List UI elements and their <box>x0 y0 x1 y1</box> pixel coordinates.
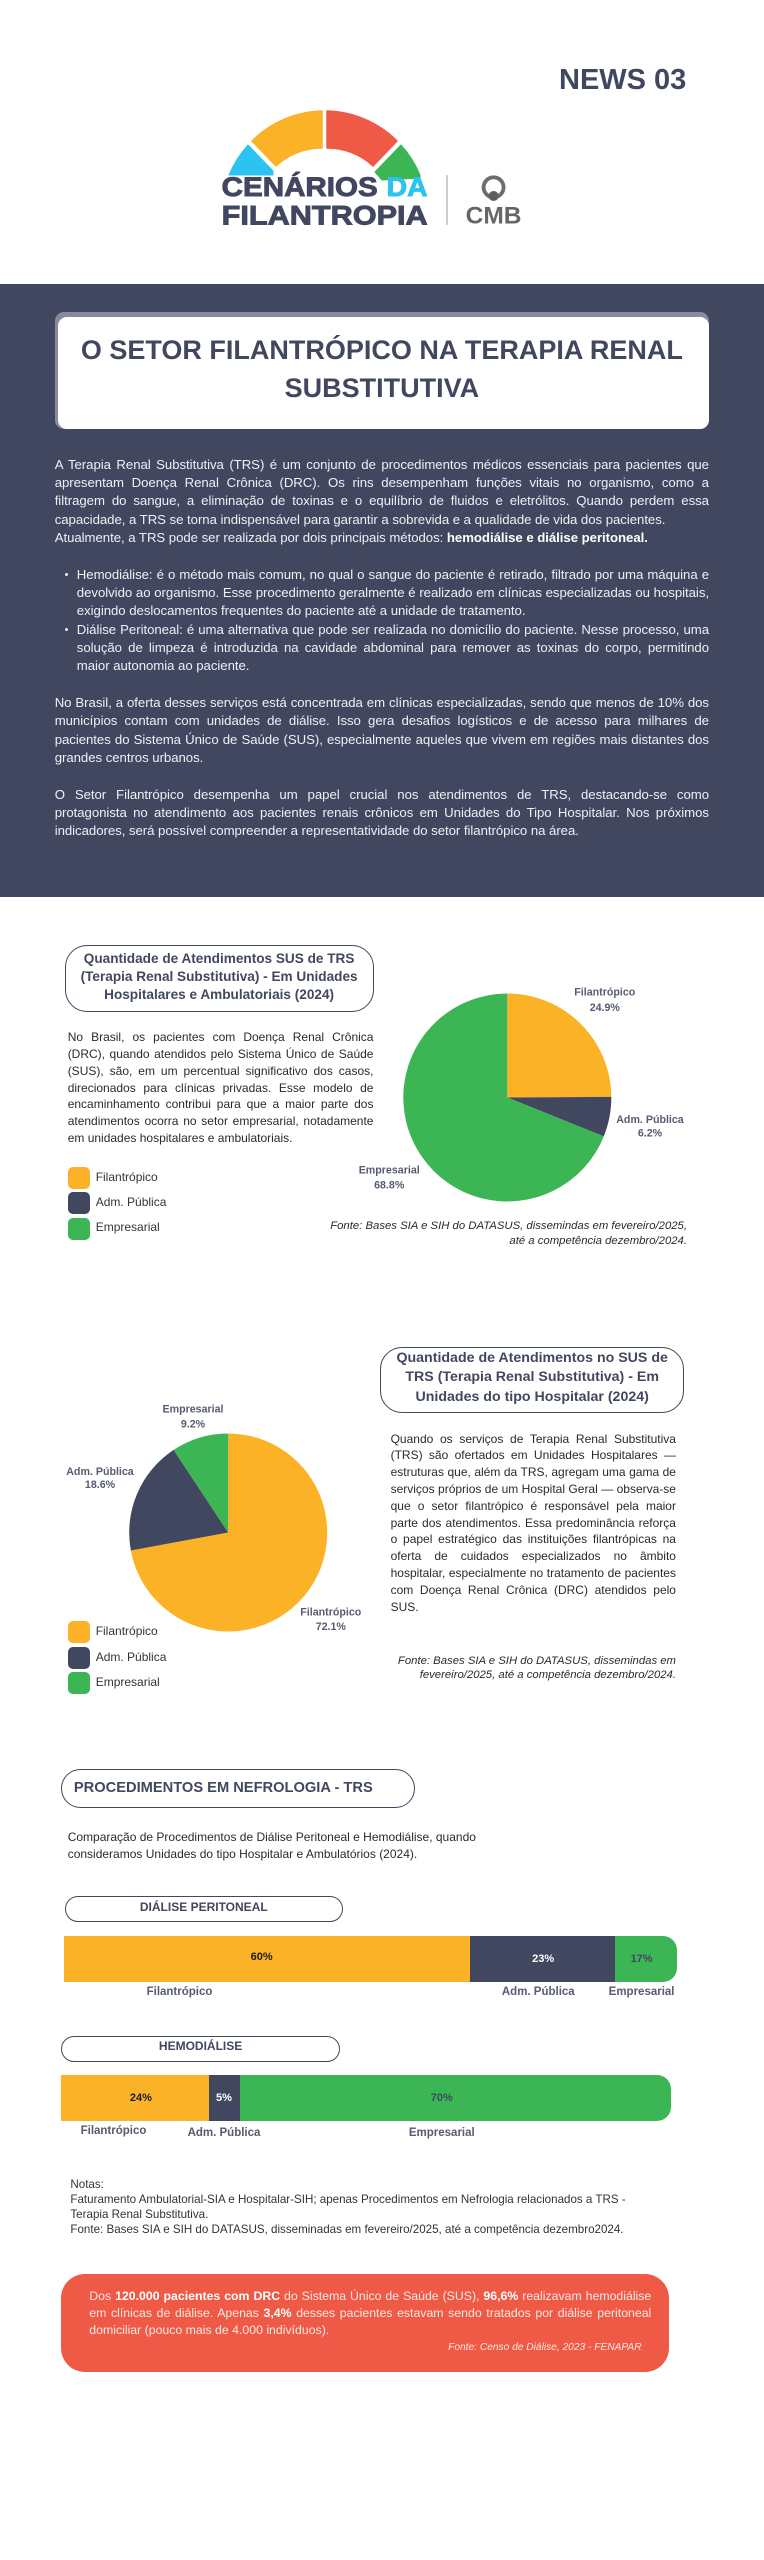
pie chart: atendimentos em unidades hospitalares: 18.6% <box>85 1479 116 1491</box>
text block: TRS definition: capacidade, a TRS se torna indispensável para garantir a sobrevida e a qualidade de vida dos pacientes. <box>55 512 665 527</box>
text block: DRC patients in SUS: encaminhamento contribui para que a maior parte dos <box>68 1097 373 1111</box>
stacked bar: diálise peritoneal: 23% <box>532 1953 554 1965</box>
text block: TRS definition: A Terapia Renal Substitutiva (TRS) é um conjunto de procedimentos médicos essenciais para pacientes que <box>55 457 709 472</box>
pie chart: atendimentos em unidades hospitalares: Filantrópico <box>300 1606 362 1618</box>
stacked bar: hemodiálise: 70% <box>431 2092 453 2104</box>
pie chart: atendimentos SUS de TRS: 24.9% <box>590 1002 620 1014</box>
pie chart: atendimentos SUS de TRS: Filantrópico <box>574 986 636 998</box>
legend: first pie: Filantrópico <box>96 1170 158 1184</box>
heading pill: atendimentos em unidades hospitalares: Unidades do tipo Hospitalar (2024) <box>416 1389 649 1405</box>
pie chart: atendimentos SUS de TRS: 6.2% <box>638 1127 663 1139</box>
list: dialysis methods <box>65 567 710 673</box>
bar labels: diálise peritoneal: Adm. Pública <box>502 1986 575 1998</box>
pie chart: atendimentos SUS de TRS <box>359 986 684 1202</box>
list: dialysis methods: Diálise Peritoneal: é uma alternativa que pode ser realizada no domicílio do paciente. Nesse processo, uma <box>77 622 709 637</box>
issue label: NEWS 03: NEWS 03 <box>559 64 686 96</box>
text block: DRC patients in SUS: No Brasil, os pacientes com Doença Renal Crônica <box>68 1030 373 1044</box>
text block: TRS definition: apresentam Doença Renal Crônica (DRC). Os rins desempenham funções vitais no organismo, como a <box>55 475 709 490</box>
bar labels: diálise peritoneal: Empresarial <box>609 1986 675 1998</box>
heading pill: atendimentos em unidades hospitalares: TRS (Terapia Renal Substitutiva) - Em <box>405 1369 659 1385</box>
heading pill: atendimentos em unidades hospitalares e ambulatoriais: Quantidade de Atendimentos SUS de TRS <box>84 951 354 966</box>
text block: notes: Fonte: Bases SIA e SIH do DATASUS, disseminadas em fevereiro/2025, até a competência dezembro2024. <box>70 2223 624 2236</box>
text block: DRC patients in SUS: direcionados para clínicas privadas. Esse modelo de <box>68 1080 373 1094</box>
text block: philanthropic sector role: O Setor Filantrópico desempenha um papel crucial nos atendimentos de TRS, destacando-se como <box>55 787 709 802</box>
text block: dialysis access in Brazil <box>55 695 709 765</box>
source note: second pie <box>398 1655 676 1681</box>
callout: dialysis census: em clínicas de diálise. Apenas 3,4% desses pacientes estavam sendo tratados por diálise peritoneal <box>89 2306 651 2320</box>
heading pill: procedimentos em nefrologia: PROCEDIMENTOS EM NEFROLOGIA - TRS <box>74 1780 373 1796</box>
text block: hospital units: estruturas que, além da TRS, agregam uma gama de <box>391 1465 676 1479</box>
source note: first pie: até a competência dezembro/2024. <box>509 1235 687 1247</box>
heading pill: atendimentos em unidades hospitalares e ambulatoriais: (Terapia Renal Substitutiva) - Em Unidades <box>81 969 358 984</box>
bar labels: hemodiálise: Adm. Pública <box>188 2127 260 2139</box>
bar labels: diálise peritoneal: Filantrópico <box>147 1986 212 1998</box>
stacked bar: hemodiálise <box>61 2075 671 2121</box>
text block: TRS definition: filtragem do sangue, a eliminação de toxinas e o equilíbrio de fluidos e eletrólitos. Quando perdem essa <box>55 493 709 508</box>
title card: O SETOR FILANTRÓPICO NA TERAPIA RENAL <box>81 335 683 365</box>
source note: first pie: Fonte: Bases SIA e SIH do DATASUS, dissemindas em fevereiro/2025, <box>330 1220 687 1232</box>
text block: dialysis access in Brazil: No Brasil, a oferta desses serviços está concentrada em clínicas especializadas, sendo que menos de 10% dos <box>55 695 709 710</box>
heading pill: procedimentos em nefrologia <box>61 1769 415 1808</box>
pie chart: atendimentos SUS de TRS: 68.8% <box>374 1180 405 1192</box>
heading pill: hemodiálise <box>61 2036 340 2062</box>
logo: Cenários da Filantropia and CMB <box>222 110 522 230</box>
heading pill: hemodiálise: HEMODIÁLISE <box>159 2039 242 2053</box>
pie chart: atendimentos em unidades hospitalares: Empresarial <box>162 1404 224 1416</box>
text block: notes: Terapia Renal Substitutiva. <box>70 2208 208 2221</box>
heading pill: atendimentos em unidades hospitalares e ambulatoriais <box>65 945 374 1012</box>
legend: first pie: Empresarial <box>96 1220 160 1234</box>
text block: philanthropic sector role: protagonista no atendimento aos pacientes renais crônicos em Unidades do Tipo Hospitalar. Nos próximos <box>55 805 709 820</box>
stacked bar: hemodiálise: 24% <box>130 2092 152 2104</box>
text block: hospital units: serviços próprios de um Hospital Geral — observa-se <box>391 1482 676 1496</box>
heading pill: diálise peritoneal <box>65 1896 343 1922</box>
source note: first pie <box>330 1220 687 1247</box>
list: dialysis methods: maior autonomia ao paciente. <box>77 658 249 673</box>
text block: hospital units: oferta de cuidados especializados no âmbito <box>391 1549 676 1563</box>
callout source: Fonte: Censo de Diálise, 2023 - FENAPAR <box>448 2342 642 2353</box>
pie chart: atendimentos em unidades hospitalares: 72.1% <box>316 1621 346 1633</box>
legend: first pie: Adm. Pública <box>96 1195 166 1209</box>
source note: second pie: fevereiro/2025, até a competência dezembro/2024. <box>420 1669 676 1681</box>
logo: Cenários da Filantropia and CMB: CMB <box>466 202 522 229</box>
list: dialysis methods: devolvido ao organismo. Esse procedimento geralmente é realizado em clínicas especializadas ou hospitais, <box>77 585 709 600</box>
text block: DRC patients in SUS: em unidades hospitalares e ambulatoriais. <box>68 1131 292 1145</box>
source note: second pie: Fonte: Bases SIA e SIH do DATASUS, dissemindas em <box>398 1655 676 1667</box>
pie chart: atendimentos em unidades hospitalares <box>66 1404 362 1633</box>
title card <box>55 312 709 429</box>
heading pill: atendimentos em unidades hospitalares <box>380 1347 684 1413</box>
stacked bar: diálise peritoneal <box>64 1936 677 1982</box>
list: dialysis methods: exigindo deslocamentos frequentes do paciente até a unidade de tratamento. <box>77 603 525 618</box>
text block: hospital units: o papel estratégico das instituições filantrópicas na <box>391 1532 676 1546</box>
legend: second pie: Adm. Pública <box>96 1650 166 1664</box>
legend: second pie <box>68 1621 166 1694</box>
heading pill: diálise peritoneal: DIÁLISE PERITONEAL <box>140 1900 268 1914</box>
text block: hospital units <box>391 1432 676 1614</box>
pie chart: atendimentos SUS de TRS: Empresarial <box>359 1164 420 1176</box>
text block: TRS definition: Atualmente, a TRS pode ser realizada por dois principais métodos: hemodiálise e diálise peritoneal. <box>55 530 648 545</box>
logo: Cenários da Filantropia and CMB: FILANTROPIA <box>222 200 428 230</box>
stacked bar: diálise peritoneal: 60% <box>251 1951 273 1963</box>
text block: dialysis access in Brazil: municípios contam com unidades de diálise. Isso gera desafios logísticos e de acesso para milhares de <box>55 713 709 728</box>
text block: hospital units: que o setor filantrópico é responsável pela maior <box>391 1499 676 1513</box>
title card: SUBSTITUTIVA <box>285 373 479 403</box>
list: dialysis methods: Hemodiálise: é o método mais comum, no qual o sangue do paciente é retirado, filtrado por uma máquina e <box>77 567 709 582</box>
text block: DRC patients in SUS <box>68 1030 374 1145</box>
text block: TRS definition <box>54 457 709 545</box>
legend: second pie: Empresarial <box>96 1675 160 1689</box>
pie chart: atendimentos SUS de TRS: Adm. Pública <box>616 1114 684 1126</box>
pie chart: atendimentos em unidades hospitalares: 9.2% <box>181 1418 206 1430</box>
stacked bar: hemodiálise: 5% <box>216 2092 232 2104</box>
list: dialysis methods: solução de limpeza é introduzida na cavidade abdominal para remover as toxinas do corpo, permitindo <box>77 640 709 655</box>
text block: notes: Faturamento Ambulatorial-SIA e Hospitalar-SIH; apenas Procedimentos em Nefrologia relacionados a TRS - <box>70 2193 626 2206</box>
text block: hospital units: (TRS) são ofertados em Unidades Hospitalares — <box>391 1448 676 1462</box>
text block: hospital units: SUS. <box>391 1600 419 1614</box>
bar labels: diálise peritoneal <box>147 1986 675 1998</box>
text block: DRC patients in SUS: (DRC), quando atendidos pelo Sistema Único de Saúde <box>68 1047 373 1061</box>
text block: dialysis access in Brazil: pacientes do Sistema Único de Saúde (SUS), especialmente aqueles que vivem em regiões mais distantes dos <box>55 732 709 747</box>
text block: DRC patients in SUS: atendimentos ocorra no setor empresarial, notadamente <box>68 1114 373 1128</box>
stacked bar: diálise peritoneal: 17% <box>631 1953 653 1965</box>
text block: procedures comparison: Comparação de Procedimentos de Diálise Peritoneal e Hemodiálise, quando <box>68 1830 476 1844</box>
bar labels: hemodiálise: Filantrópico <box>81 2125 146 2137</box>
text block: philanthropic sector role <box>55 787 709 838</box>
heading pill: atendimentos em unidades hospitalares e ambulatoriais: Hospitalares e Ambulatoriais (2024) <box>104 987 334 1002</box>
bar labels: hemodiálise <box>81 2125 475 2139</box>
logo: Cenários da Filantropia and CMB: DA <box>387 172 428 202</box>
legend: first pie <box>68 1167 166 1240</box>
pie chart: atendimentos em unidades hospitalares: Adm. Pública <box>66 1466 134 1478</box>
callout: dialysis census: Dos 120.000 pacientes com DRC do Sistema Único de Saúde (SUS), 96,6% realizavam hemodiálise <box>89 2289 651 2303</box>
callout: dialysis census <box>61 2274 669 2372</box>
text block: procedures comparison <box>68 1830 476 1861</box>
text block: notes <box>70 2178 626 2236</box>
logo: Cenários da Filantropia and CMB: CENÁRIOS <box>222 171 378 202</box>
callout: dialysis census: domiciliar (pouco mais de 4.000 indivíduos). <box>89 2323 329 2337</box>
panel: introduction band <box>0 284 764 897</box>
legend: second pie: Filantrópico <box>96 1624 158 1638</box>
text block: dialysis access in Brazil: grandes centros urbanos. <box>55 750 203 765</box>
text block: hospital units: Quando os serviços de Terapia Renal Substitutiva <box>391 1432 676 1446</box>
text block: hospital units: parte dos atendimentos. Essa predominância reforça <box>391 1516 676 1530</box>
text block: philanthropic sector role: indicadores, será possível compreender a representatividade do setor filantrópico na área. <box>55 823 579 838</box>
text block: DRC patients in SUS: (SUS), são, em um percentual significativo dos casos, <box>68 1064 373 1078</box>
heading pill: atendimentos em unidades hospitalares: Quantidade de Atendimentos no SUS de <box>396 1350 668 1366</box>
text block: hospital units: hospitalar, especialmente no tratamento de pacientes <box>391 1566 676 1580</box>
text block: notes: Notas: <box>70 2178 104 2190</box>
text block: procedures comparison: consideramos Unidades do tipo Hospitalar e Ambulatórios (2024). <box>68 1847 417 1861</box>
text block: hospital units: com Doença Renal Crônica (DRC) atendidos pelo <box>391 1583 676 1597</box>
bar labels: hemodiálise: Empresarial <box>409 2127 475 2139</box>
